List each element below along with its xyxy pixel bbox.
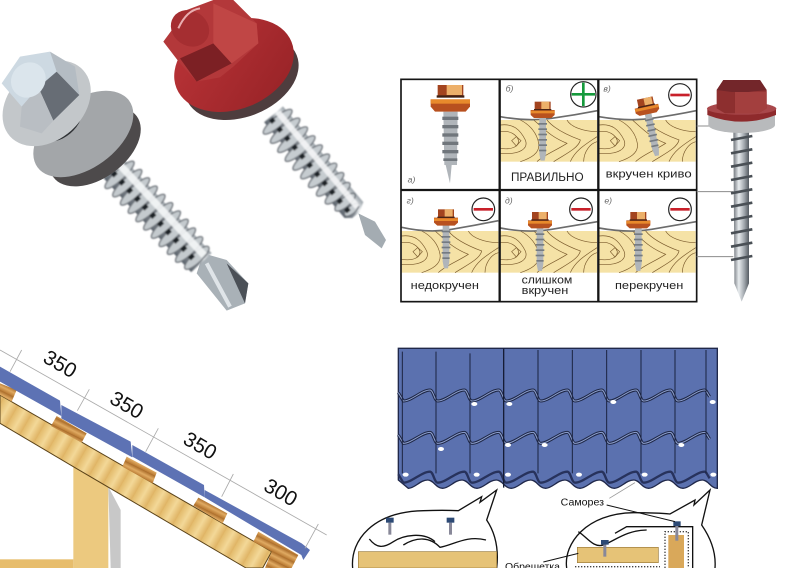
panel а: screw alone bbox=[408, 85, 470, 185]
panel д: too deep: слишком bbox=[522, 274, 572, 286]
dimension labels: 300 bbox=[260, 474, 301, 511]
panel е: over-tightened bbox=[599, 195, 696, 292]
panel д: too deep: вкручен bbox=[522, 285, 568, 297]
dimension labels: 350 bbox=[39, 346, 81, 383]
panel д: too deep: д) bbox=[505, 195, 513, 205]
red screw tip bbox=[358, 213, 386, 248]
diagram: screw installation panels bbox=[401, 79, 776, 302]
panel background bbox=[401, 79, 697, 302]
blue metal tile profile bbox=[0, 367, 310, 560]
panel б: correct: б) bbox=[506, 84, 514, 94]
label: Саморез: Саморез bbox=[561, 498, 604, 509]
panel г: under-tightened: недокручен bbox=[411, 280, 479, 292]
silver screw drill tip bbox=[197, 253, 248, 311]
large red screw, cross-section bbox=[707, 80, 776, 302]
pointer lines to screw bbox=[697, 126, 733, 257]
panel г: under-tightened: г) bbox=[407, 195, 414, 205]
panel г: under-tightened bbox=[402, 195, 498, 292]
dimension labels: 350 bbox=[106, 387, 147, 424]
dimension labels bbox=[39, 346, 301, 511]
panel д: too deep bbox=[500, 195, 597, 297]
post bbox=[73, 467, 108, 568]
diagram: roof batten spacing bbox=[0, 346, 327, 568]
callout: left detail bubble bbox=[352, 490, 497, 568]
ceiling beam bbox=[0, 559, 73, 568]
silver screw washer bbox=[35, 91, 155, 203]
red screw threaded shaft bbox=[258, 103, 370, 227]
diagram: metal tile sheet with screw points bbox=[352, 348, 717, 568]
grey insulation strip bbox=[108, 487, 121, 568]
panel а: screw alone: а) bbox=[408, 175, 415, 185]
panel е: over-tightened: е) bbox=[604, 195, 612, 205]
tile vertical joints bbox=[402, 350, 706, 473]
panel б: correct bbox=[500, 82, 597, 184]
photo: red coated roofing screw bbox=[160, 0, 386, 248]
battens bbox=[0, 383, 298, 568]
screw points bbox=[403, 400, 716, 477]
panel grid lines bbox=[401, 79, 697, 302]
tile sheet bbox=[398, 348, 717, 488]
rafter plank bbox=[0, 395, 272, 568]
label: Обрешетка bbox=[505, 553, 578, 568]
red screw washer bbox=[172, 19, 311, 136]
panel в: crooked: вкручен криво bbox=[606, 169, 692, 181]
label: Саморез bbox=[561, 483, 675, 522]
panel б: correct: ПРАВИЛЬНО bbox=[511, 170, 584, 184]
photo: galvanized silver roofing screw bbox=[0, 43, 248, 311]
silver screw hex head bbox=[35, 98, 88, 149]
panel е: over-tightened: перекручен bbox=[615, 280, 683, 292]
tile ridges bbox=[398, 390, 710, 483]
dimension line bbox=[0, 350, 327, 548]
silver screw threaded shaft bbox=[100, 156, 216, 276]
red screw hex head bbox=[163, 0, 258, 82]
callout: right detail bubble bbox=[566, 490, 715, 568]
dimension labels: 350 bbox=[179, 427, 221, 465]
panel в: crooked: в) bbox=[603, 84, 611, 94]
panel в: crooked bbox=[599, 84, 696, 181]
